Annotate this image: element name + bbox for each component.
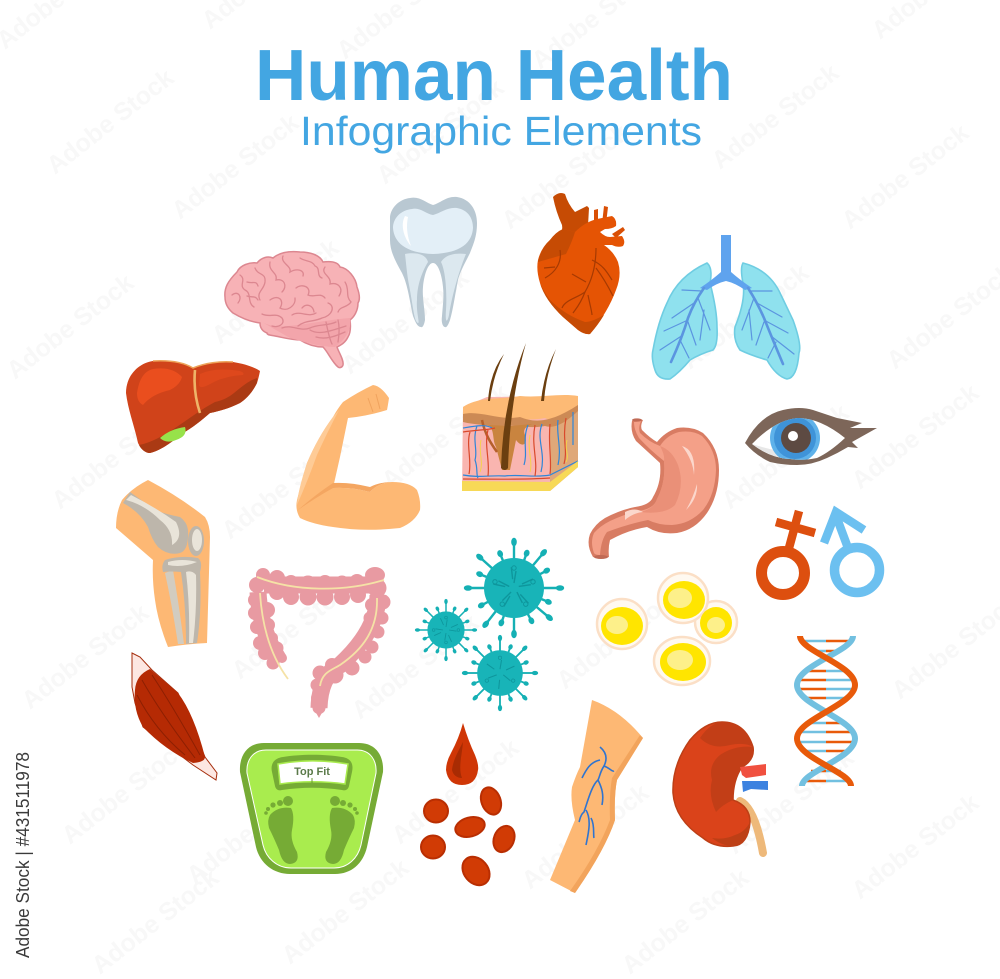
icon: heart <box>537 193 625 334</box>
watermark pattern: Adobe Stock <box>56 734 194 850</box>
watermark pattern: Adobe Stock <box>226 569 364 685</box>
gallbladder <box>160 427 186 442</box>
watermark pattern: Adobe Stock <box>86 864 224 979</box>
watermark pattern: Adobe Stock <box>181 774 319 890</box>
watermark pattern: Adobe Stock <box>706 59 844 175</box>
heart body <box>537 216 624 334</box>
icon: kidney <box>673 722 768 853</box>
watermark pattern: Adobe Stock <box>846 379 984 495</box>
watermark pattern: Adobe Stock <box>166 109 304 225</box>
watermark pattern: Adobe Stock <box>516 779 654 895</box>
icon: lungs <box>652 235 800 379</box>
icon: DNA helix <box>797 636 855 786</box>
title: Human Health <box>255 36 733 116</box>
icon: eye <box>745 408 877 465</box>
icon: flexed arm <box>296 385 420 530</box>
female symbol <box>762 511 815 594</box>
male symbol <box>824 512 880 592</box>
watermark pattern: Adobe Stock <box>206 234 344 350</box>
watermark pattern: Adobe Stock <box>846 789 984 905</box>
icon: knee joint <box>116 480 210 647</box>
icon: colon <box>248 567 390 718</box>
watermark pattern: Adobe Stock <box>551 579 689 695</box>
orange strand <box>797 636 855 786</box>
heart vessels <box>553 193 625 240</box>
watermark pattern: Adobe Stock <box>46 399 184 515</box>
base pairs <box>798 641 854 781</box>
icon: brain <box>225 252 359 368</box>
watermark pattern: Adobe Stock <box>386 734 524 850</box>
watermark pattern: Adobe Stock <box>216 429 354 545</box>
icon: tooth <box>390 197 477 327</box>
watermark pattern: Adobe Stock <box>716 399 854 515</box>
watermark pattern: Adobe Stock <box>676 259 814 375</box>
blue strand <box>797 636 855 786</box>
watermark pattern: Adobe Stock <box>496 119 634 235</box>
hairs <box>488 343 556 470</box>
icon: weight scale <box>240 743 383 874</box>
watermark pattern: Adobe Stock <box>336 264 474 380</box>
renal vein <box>742 781 768 792</box>
watermark pattern: Adobe Stock <box>616 864 754 979</box>
iris <box>770 418 820 460</box>
footprints <box>264 796 359 864</box>
ligament <box>195 370 200 413</box>
watermark pattern: Adobe Stock <box>346 609 484 725</box>
icon: gender symbols <box>762 511 880 594</box>
blood cells <box>421 785 518 891</box>
watermark pattern: Adobe Stock <box>1 269 139 385</box>
stock id text: Adobe Stock | #431511978 <box>13 752 33 958</box>
colon bands <box>257 577 384 686</box>
watermark pattern: Adobe Stock <box>371 74 509 190</box>
watermark pattern: Adobe Stock <box>836 119 974 235</box>
watermark pattern: Adobe Stock <box>16 599 154 715</box>
watermark pattern: Adobe Stock <box>276 854 414 970</box>
ureter <box>740 801 763 853</box>
small virus <box>415 599 477 661</box>
watermark pattern: Adobe Stock <box>721 744 859 860</box>
icon: leg with varicose veins <box>550 700 643 893</box>
icon: muscle <box>132 653 217 780</box>
icon: liver <box>126 361 260 453</box>
large virus <box>464 538 564 638</box>
scale display <box>272 755 353 790</box>
icon: skin cross section <box>462 343 578 491</box>
icon: blood drop and cells <box>421 723 518 891</box>
watermark pattern: Adobe Stock <box>376 379 514 495</box>
watermark pattern: Adobe Stock <box>41 64 179 180</box>
icon: fat cells <box>597 573 737 685</box>
renal artery <box>740 764 766 778</box>
subtitle: Infographic Elements <box>300 108 702 154</box>
medium virus <box>462 635 538 711</box>
scale label: Top Fit <box>294 766 330 778</box>
icon: stomach <box>589 418 719 559</box>
icon: viruses <box>415 538 564 711</box>
